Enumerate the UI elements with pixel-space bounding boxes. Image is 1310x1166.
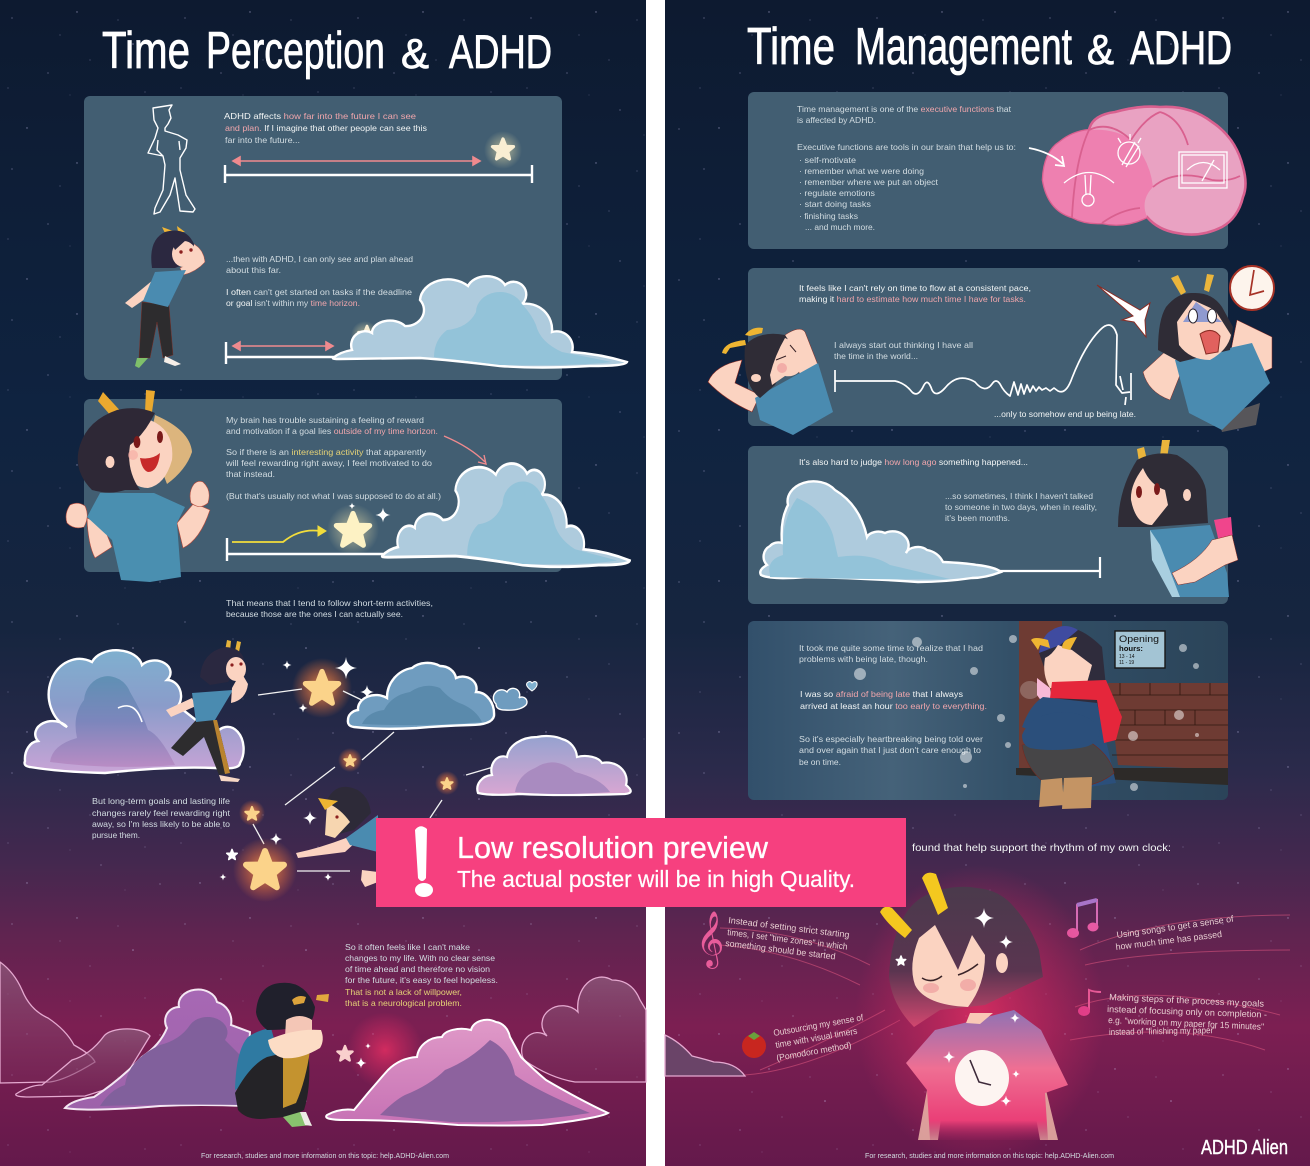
- icon: background cloud outline right: [522, 977, 646, 1082]
- footer source left: For research, studies and more information on this topic: help.ADHD-Alien.com: [201, 1151, 449, 1160]
- text: long-term goals: changes rarely feel rewarding right: [92, 808, 231, 818]
- text: executive functions: · self-motivate: [799, 155, 856, 165]
- text: time flow: It feels like I can't rely on time to flow at a consistent pace,: [799, 283, 1031, 293]
- arrow: long time horizon: [233, 157, 480, 165]
- text: two days: ...so sometimes, I think I haven't talked: [945, 491, 1093, 501]
- icon: faded red glow: [347, 1012, 423, 1088]
- title: Time Management and ADHD: [747, 18, 1232, 76]
- icon: crawling character: [296, 787, 378, 887]
- text: time zones: [725, 915, 850, 962]
- icon: small stars along path: [239, 748, 459, 826]
- text: two days: it's been months.: [945, 513, 1010, 523]
- title: Time Management and ADHD: Time: [747, 18, 835, 76]
- panel: seeing into the future: [84, 96, 562, 380]
- icon: opening hours sign: 13 - 14: [1119, 654, 1135, 660]
- text: ADHD affects how far: ADHD affects how far into the future I can see: [224, 111, 416, 121]
- arrow: to brain: [1029, 148, 1064, 166]
- text: time flow: making it hard to estimate how much time I have for tasks.: [799, 294, 1026, 304]
- text: executive functions: · remember what we were doing: [799, 166, 924, 176]
- text: no vision for the future: changes to my life. With no clear sense: [345, 953, 495, 963]
- text: making steps: instead of focusing only on completion -: [1107, 1004, 1267, 1020]
- text: afraid of being late: [799, 643, 987, 767]
- text: using songs: [1115, 914, 1235, 952]
- text: then with ADHD: I often can't get started on tasks if the deadline: [226, 287, 412, 297]
- icon: character shading eyes: [125, 226, 205, 368]
- text: executive functions: · remember where we put an object: [799, 177, 939, 187]
- icon: star hidden behind cloud: [351, 321, 379, 349]
- text: making steps: Making steps of the process my goals: [1109, 992, 1265, 1009]
- icon: opening hours sign: Opening: [1119, 634, 1159, 644]
- text: executive functions: Executive functions are tools in our brain that help us to:: [797, 142, 1016, 152]
- icon: panicked character: [1143, 274, 1272, 432]
- arrow: pointing to cloud: [444, 436, 486, 464]
- text: afraid of being late: It took me quite some time to realize that I had: [799, 643, 983, 653]
- text: visual timers: [773, 1012, 864, 1063]
- text: then with ADHD: or goal isn't within my time horizon.: [226, 298, 360, 308]
- text: long-term goals: But long-term goals and lasting life: [92, 796, 230, 806]
- panel: executive functions: [748, 92, 1228, 249]
- text: executive functions: · start doing tasks: [799, 199, 871, 209]
- text: afraid of being late: and over again that I just don't care enough to: [799, 745, 981, 755]
- text: time zones: Instead of setting strict starting: [728, 915, 850, 940]
- text: brain reward: will feel rewarding right away, I feel motivated to do: [225, 458, 432, 468]
- icon: brain with gauges: [1043, 107, 1246, 235]
- title: Time Management and ADHD: ADHD: [1130, 21, 1232, 74]
- icon: blue cloud: [348, 663, 494, 729]
- timeline: short horizon: [226, 342, 340, 364]
- icon: clock: [1230, 266, 1274, 310]
- title: Time Perception and ADHD: [102, 22, 552, 80]
- icon: tomato timer: [742, 1032, 766, 1058]
- text: no vision for the future: So it often feels like I can't make: [345, 942, 470, 952]
- text: afraid of being late: problems with being late, though.: [799, 654, 928, 664]
- text: brain reward: My brain has trouble sustaining a feeling of reward: [226, 415, 424, 425]
- text: executive functions: Time management is one of the executive functions that: [797, 104, 1012, 114]
- callout: low resolution preview banner: The actual poster will be in high Quality.: [457, 866, 855, 892]
- text: no vision for the future: [345, 942, 498, 1008]
- text: visual timers: (Pomodoro method): [776, 1040, 852, 1063]
- text: no vision for the future: of time ahead and therefore no vision: [345, 964, 490, 974]
- icon: character waiting in snow: [1020, 626, 1122, 809]
- arrow: short time horizon: [233, 342, 333, 350]
- text: executive functions: ... and much more.: [805, 222, 875, 232]
- title: Time Perception and ADHD: ADHD: [449, 25, 552, 78]
- text: brain reward: (But that's usually not what I was supposed to do at all.): [226, 491, 441, 501]
- icon: pink bottom-left cloud right poster: [665, 1035, 745, 1076]
- icon: purple cloud left of sitting figure: [65, 990, 250, 1110]
- text: executive functions: · finishing tasks: [799, 211, 858, 221]
- arrow: yellow toward star: [232, 530, 320, 542]
- text: ADHD affects how far: [224, 111, 427, 145]
- icon: small star by sitting figure: [337, 1043, 371, 1068]
- text: afraid of being late: arrived at least an hour too early to everything.: [800, 701, 987, 711]
- panel: right poster background: [665, 0, 1310, 1166]
- panel: how long ago: [748, 446, 1228, 604]
- timeline: past: [990, 557, 1100, 578]
- text: using songs: Using songs to get a sense of: [1116, 914, 1235, 940]
- icon: music notes: [1067, 900, 1098, 938]
- icon: opening hours sign: 11 - 19: [1119, 660, 1134, 666]
- icon: glowing star far: [484, 131, 522, 169]
- text: executive functions: [797, 104, 1016, 232]
- text: time zones: something should be started: [725, 938, 836, 962]
- text: two days: [945, 491, 1097, 523]
- title: Time Perception and ADHD: Time: [102, 22, 190, 80]
- text: afraid of being late: I was so afraid of being late that I always: [800, 689, 963, 699]
- icon: central character with clock: [855, 865, 1105, 1165]
- title: Time Management and ADHD: &: [1087, 26, 1114, 73]
- icon: single note: [1078, 990, 1101, 1016]
- text: all the time: I always start out thinking I have all: [834, 340, 973, 350]
- text: no vision for the future: for the future, it's easy to feel hopeless.: [345, 975, 498, 985]
- icon: character calling out: [166, 640, 248, 782]
- icon: cloud blocking the horizon: [333, 276, 627, 368]
- icon: brick wall and door: [1016, 621, 1228, 785]
- text: visual timers: Outsourcing my sense of: [773, 1012, 864, 1038]
- snowflakes: [854, 635, 1199, 791]
- text: time zones: times, I set "time zones" in which: [727, 927, 848, 952]
- icon: character with phone: [1118, 440, 1238, 597]
- text: short-term activities: That means that I tend to follow short-term activities,: [226, 598, 433, 608]
- text: long-term goals: [92, 796, 231, 840]
- icon: glowing orange star: [282, 657, 374, 718]
- text: short-term activities: [226, 598, 433, 619]
- text: rhythm of my own clock: found that help support the rhythm of my own clock:: [912, 843, 1171, 854]
- icon: cloud of the past: [760, 481, 1001, 582]
- text: executive functions: · regulate emotions: [799, 188, 875, 198]
- text: all the time: [834, 340, 973, 361]
- text: long-term goals: pursue them.: [92, 830, 140, 840]
- icon: small cloud and heart: [493, 682, 537, 710]
- text: then with ADHD: about this far.: [226, 265, 281, 275]
- icon: opening hours sign: hours:: [1119, 646, 1143, 653]
- footer source right: For research, studies and more information on this topic: help.ADHD-Alien.com: [865, 1151, 1114, 1160]
- text: ending up late: ...only to somehow end up being late.: [994, 409, 1136, 419]
- text: brain reward: So if there is an interesting activity that apparently: [226, 447, 427, 457]
- logo: ADHD Alien: ADHD Alien: [1201, 1137, 1288, 1159]
- decorative staff lines: [720, 915, 1290, 1075]
- text: making steps: instead of "finishing my paper": [1109, 1025, 1216, 1037]
- text: executive functions: is affected by ADHD.: [797, 115, 876, 125]
- timeline: short term: [227, 538, 390, 561]
- callout: low resolution preview banner: [376, 818, 906, 907]
- text: short-term activities: because those are the ones I can actually see.: [226, 609, 403, 619]
- icon: large gradient cloud: [25, 650, 244, 773]
- text: long-term goals: away, so I'm less likely to be able to: [92, 819, 230, 829]
- text: brain reward: that instead.: [226, 469, 275, 479]
- title: Time Perception and ADHD: &: [401, 30, 429, 77]
- text: ADHD affects how far: and plan. If I imagine that other people can see this: [225, 123, 427, 133]
- chart: time wave line: [835, 325, 1131, 405]
- text: no vision for the future: that is a neurological problem.: [345, 998, 462, 1008]
- text: making steps: e.g. "working on my paper for 15 minutes": [1108, 1015, 1264, 1032]
- panel: left poster background: [0, 0, 646, 1166]
- icon: shock burst: [1097, 285, 1150, 337]
- text: making steps: [1107, 992, 1267, 1037]
- title: Time Management and ADHD: Management: [855, 18, 1072, 76]
- panel: reward and motivation: [84, 399, 562, 572]
- text: visual timers: time with visual timers: [775, 1026, 859, 1050]
- icon: purple gradient cloud: [477, 736, 631, 795]
- icon: cloud near reward panel: [382, 464, 630, 567]
- icon: excited character: [66, 390, 210, 582]
- callout: low resolution preview banner: Low resolution preview: [457, 830, 769, 865]
- text: two days: to someone in two days, when in reality,: [945, 502, 1097, 512]
- panel: being too early: [748, 621, 1228, 800]
- icon: background cloud outlines left: [0, 962, 150, 1097]
- icon: big glowing star: [220, 811, 332, 902]
- text: brain reward: [225, 415, 441, 501]
- icon: neurotypical outline figure: [148, 105, 195, 214]
- icon: relaxed character: [708, 328, 833, 435]
- text: all the time: the time in the world...: [834, 351, 918, 361]
- icon: interesting activity star: [327, 502, 390, 556]
- icon: sitting sad character: [235, 983, 329, 1127]
- text: using songs: how much time has passed: [1115, 929, 1222, 952]
- icon: opening hours sign: [1115, 631, 1165, 668]
- text: no vision for the future: That is not a lack of willpower,: [345, 987, 462, 997]
- icon: treble clef: 𝄞: [696, 911, 724, 969]
- text: how long ago: It's also hard to judge how long ago something happened...: [799, 457, 1028, 467]
- panel: inconsistent time flow: [748, 268, 1228, 426]
- title: Time Perception and ADHD: Perception: [206, 22, 385, 80]
- text: afraid of being late: be on time.: [799, 757, 841, 767]
- text: then with ADHD: ...then with ADHD, I can only see and plan ahead: [226, 254, 413, 264]
- connector lines between goals: [253, 689, 507, 871]
- icon: pink purple cloud right: [326, 1020, 608, 1126]
- text: ADHD affects how far: far into the future...: [225, 135, 300, 145]
- text: brain reward: and motivation if a goal lies outside of my time horizon.: [226, 426, 438, 436]
- text: afraid of being late: So it's especially heartbreaking being told over: [799, 734, 983, 744]
- timeline: long horizon: [225, 165, 532, 183]
- text: time flow: [799, 283, 1031, 304]
- text: then with ADHD: [226, 254, 413, 308]
